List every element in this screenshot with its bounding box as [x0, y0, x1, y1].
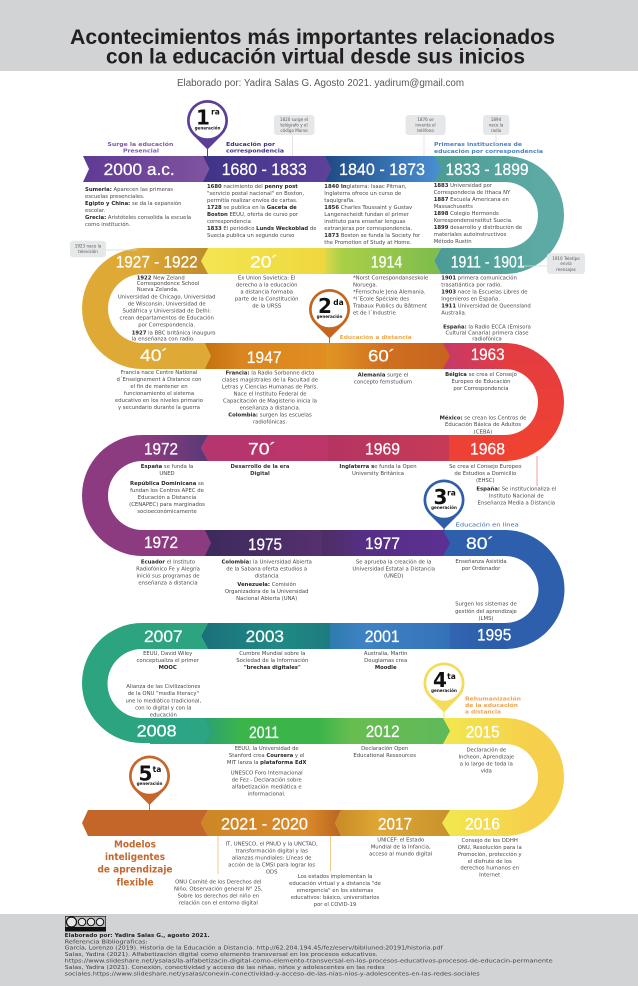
text: 1995: gestión del aprendizaje	[455, 608, 517, 615]
connector: 1968 España	[536, 456, 538, 486]
text: 1911-1901: Australia.	[441, 311, 467, 317]
text: 2021-2020 estados: emergencia" en los sistemas	[297, 888, 373, 894]
ribbon: row 4 and left curve	[82, 435, 506, 556]
pin: 4ta generación: ta	[447, 672, 456, 681]
text: 1680-1833: 1728 se publica en la Gaceta de	[207, 205, 297, 211]
heading: Surge la educación Presencial	[107, 141, 173, 155]
text: España Radio ECCA: radiofónica	[472, 335, 502, 342]
pin: 4ta generación: 4	[433, 668, 447, 692]
text: 1833-1899: 1899 desarrollo y distribución de	[434, 225, 522, 231]
text: 1833-1899: 1883 Universidad por	[434, 183, 492, 189]
callout: 1910 teletipo: 1910 Teletipo	[552, 256, 580, 261]
pin: 3ra generación	[424, 480, 464, 530]
text: 2007: conceptualiza el primer	[136, 658, 200, 664]
pin: 4ta generación: generación	[431, 688, 457, 693]
text: 1972 Ecuador: enseñanza a distancia	[138, 581, 198, 587]
text: 1927-1922: 1927 la BBC británica inauguro	[132, 331, 216, 337]
text: 1840-1873: 1856 Charles Toussaint y Gustav	[324, 205, 412, 211]
ribbon: row 3 and right curve	[150, 343, 564, 461]
text: 2021-2020 IT: transformación digital y las	[236, 847, 308, 854]
text: 2007: EEUU, David Wiley	[143, 651, 192, 657]
text: 2016: ONU, Resolución para la	[458, 844, 522, 851]
heading: Educación por correspondencia: correspondencia	[226, 149, 284, 155]
year labels: 40´	[140, 347, 168, 365]
text: 1977: Universidad Estatal a Distancia	[352, 567, 435, 573]
text: 2021-2020 IT: ODS	[266, 870, 278, 876]
text: 20´: de la URSS	[252, 304, 282, 310]
text: 1911-1901: 1901 primera comunicación	[441, 276, 517, 282]
text: 1914: *l´Ecole Spéciale des	[353, 296, 409, 303]
text: 2011: EEUU, la Universidad de	[235, 746, 299, 752]
callout: 1894 radio: 1894	[491, 117, 502, 122]
text: 60´: concepto fernstudium	[354, 380, 412, 386]
callout: 1923 televisión: televisión	[78, 249, 98, 254]
header band	[0, 0, 638, 71]
callout: 1820 telégrafo: 1820 surge el	[280, 117, 308, 122]
text: 1914: Trabaux Publics du Bâtment	[352, 303, 427, 310]
text: 1947: Francia: la Radio Sorbonne dicto	[226, 371, 314, 377]
title: Acontecimientos más importantes relacionados	[70, 26, 555, 49]
text: 1968 España: Enseñanza Media a Distancia	[478, 501, 555, 507]
pin: 5ta generación: 5	[139, 762, 152, 786]
heading: Surge la educación Presencial: Presencial	[123, 149, 159, 155]
year labels: 2003	[246, 628, 284, 646]
heading: Educación en línea: Educación en línea	[456, 521, 519, 528]
text: 2016: derechos humanos en	[460, 866, 519, 872]
text: 1833-1899: 1887 Escuela Americana en	[434, 197, 509, 203]
text: 2011: de Fez - Declaración sobre	[232, 776, 302, 783]
text: 1680-1833: "servicio postal nacional" en Boston,	[207, 191, 304, 197]
connector: 2021 right	[330, 836, 332, 871]
text: 1975: de la Sabana oferta estudios a	[226, 567, 307, 573]
text: 20´: a distancia formaba	[240, 290, 293, 296]
pin: 1ra generación: ra	[211, 108, 220, 116]
text: 2017: acceso al mundo digital	[369, 851, 432, 857]
pin: 3ra generación: 3	[434, 485, 447, 509]
year labels: 2000 a.c.	[104, 161, 175, 179]
text: 40´: funcionamiento el sistema	[124, 391, 194, 397]
footer references: Salas, Yadira (2021). Alfabetización digital como elemento transversal en los procesos educativos.	[65, 951, 378, 958]
year labels: 1975	[248, 536, 282, 554]
text: 1995: Surgen los sistemas de	[455, 602, 517, 608]
text: 1968 España: Instituto Nacional de	[489, 494, 544, 500]
text: 1963 Bélgica: Bélgica se crea el Consejo	[445, 372, 517, 378]
ribbon: row 1 and first curve	[83, 156, 564, 274]
text: 1975: Colombia: la Universidad Abierta	[222, 560, 312, 566]
text: 1840-1873: taquigrafía.	[324, 197, 355, 204]
text: 2000 a.c.: Grecia: Aristóteles consolida la escuela	[85, 215, 191, 221]
year labels: 1972	[144, 440, 178, 458]
text: 2016: Consejo de los DDHH	[462, 838, 518, 844]
callout: 1910 teletipo: envía	[560, 261, 572, 266]
pin: 3ra generación: ra	[447, 488, 456, 498]
text: 2016: Promoción, protección y	[458, 851, 522, 858]
text: 1968 España: España: Se institucionaliza el	[476, 487, 556, 493]
year labels: 1995	[477, 626, 511, 644]
text: 2008: educación	[150, 711, 177, 718]
text: 1914: et de l´Industrie	[353, 311, 396, 317]
heading: Educación por correspondencia: Educación por	[226, 141, 275, 148]
text: 1833-1899: materiales autoinstructivos	[434, 232, 506, 238]
text: 2011: Stanford crea Coursera y el	[229, 753, 304, 759]
text: 1680-1833: Suecia publica un segundo curso	[207, 233, 294, 239]
text: 1947: enseñanza a distancia.	[240, 406, 301, 412]
text: 1927-1922: Universidad de Chicago, Universidad	[118, 295, 216, 301]
year labels: 1911 - 1901	[451, 254, 525, 272]
text: 2021-2020 ONU: ONU Comité de los Derechos del	[175, 878, 262, 885]
text: 2017: UNICEF: el Estado	[377, 838, 424, 844]
text: 1927-1922: por Correspondencia.	[138, 323, 195, 329]
heading: Modelos inteligentes	[98, 839, 173, 888]
text: 40´: d´Enseignement à Distance con	[116, 376, 202, 383]
text: España Radio ECCA: Cultural Canaria) primera clase	[446, 330, 528, 336]
heading: Modelos inteligentes: de aprendizaje	[98, 865, 173, 876]
callout: 1923 televisión: 1923 nace la	[75, 244, 102, 248]
text: 2011: UNESCO Foro Internacional	[231, 770, 303, 776]
text: 1927-1922: crean departamentos de Educación	[120, 315, 214, 322]
text: 20´: parte de la Constitución	[235, 296, 298, 303]
callout: 1894 radio: nace la	[489, 122, 504, 128]
text: 1911-1901: 1903 nace la Escuelas Libres de	[441, 290, 528, 296]
text: 1927-1922: de Wisconsin, Universidad de	[128, 302, 206, 308]
text: 1947: radiofónicas.	[253, 419, 287, 426]
footer references: Elaborado por: Yadira Salas G., agosto 2021.	[65, 933, 210, 939]
text: 2015: Declaración de	[466, 747, 506, 754]
callout: 1894 radio: radio	[491, 128, 502, 133]
text: 2000 a.c.: escolar.	[85, 208, 106, 214]
text: 1680-1833: correspondencia	[207, 219, 251, 225]
text: 2007: MOOC	[159, 665, 177, 671]
callout: 1820 telégrafo: telégrafo y el	[280, 122, 308, 128]
ribbon: row 8	[82, 810, 510, 836]
text: 2015: Incheon, Aprendizaje	[458, 755, 514, 761]
text: 1972 España: fundan los Centros APEC de	[130, 488, 204, 494]
pin: 1ra generación	[187, 100, 228, 156]
text: 1969: Inglaterra se funda la Open	[339, 464, 417, 470]
footer references: García, Lorenzo (2019). Historia de la Educación a Distancia. http://62.204.194.45/fez/eserv/bibliuned:20191/historia.pdf	[65, 945, 443, 952]
year labels: 2015	[466, 724, 500, 742]
callout: 1876 teléfono: inventa el	[415, 122, 436, 128]
pin: 2da generación: 2	[318, 294, 332, 318]
text: 1914: Noruega.	[353, 283, 378, 289]
text: 1977: (UNED)	[384, 574, 403, 580]
pin: 3ra generación: generación	[431, 505, 457, 510]
text: 2016: Internet	[479, 873, 500, 879]
year labels: 1969	[365, 440, 400, 458]
text: 1995: (LMS)	[478, 616, 494, 622]
subtitle: Elaborado por: Yadira Salas G. Agosto 2021. yadirum@gmail.com	[177, 78, 464, 89]
title: con la educación virtual desde sus inicios	[106, 45, 525, 68]
year labels	[104, 161, 528, 834]
ribbon: row 7 and right curve	[150, 718, 564, 836]
text: 40´: y secundario durante la guerra	[118, 405, 200, 411]
text: 2008: de la ONU "media literacy"	[128, 691, 199, 697]
text: 1680-1833: 1680 nacimiento del penny post	[207, 184, 298, 190]
heading: Educación a distancia: Educación a distancia	[340, 334, 412, 341]
text: 1927-1922: Correspondence School	[137, 281, 199, 287]
callout: 1894 radio	[483, 115, 509, 146]
footer band	[0, 914, 638, 986]
text: 1972 España: UNED	[159, 471, 175, 477]
text: 1833-1899: Massachusetts	[434, 204, 473, 210]
footer references: sociales.https://www.slideshare.net/ysalas/conexin-conectividad-y-acceso-de-las-nias-nios-y-adolescentes-en-las-redes-sociales	[65, 972, 480, 978]
year labels: 80´	[466, 535, 494, 553]
text: 1840-1873: Inglaterra ofrece un curso de	[324, 191, 401, 197]
year labels: 2017	[378, 816, 412, 834]
text: 1840-1873: extranjeras por correspondencia.	[324, 226, 412, 232]
text: 2011: alfabetización mediática e	[232, 783, 302, 790]
heading: Modelos inteligentes: inteligentes	[105, 852, 165, 863]
ribbon: row 2 and left curve	[82, 248, 441, 369]
year labels: 1977	[365, 535, 400, 553]
text: 2021-2020 ONU: Sobre los derechos del niño en	[178, 893, 259, 899]
text: 2016: el disfrute de los	[468, 859, 512, 865]
text: 1977: Se aprueba la creación de la	[356, 559, 431, 566]
pin: 5ta generación: generación	[137, 781, 162, 786]
heading: Rehumanización: Rehumanización	[465, 696, 521, 703]
text: 1972 Ecuador: inició sus programas de	[136, 573, 200, 580]
text: 1972 España: República Dominicana se	[130, 481, 204, 487]
year labels: 1968	[470, 440, 505, 458]
text: 2012: Educational Ressources	[353, 753, 416, 759]
text: 2021-2020 IT: acción de la CMSI para lograr los	[228, 861, 315, 868]
heading: Rehumanización	[465, 696, 521, 716]
text: 40´: el fin de mantener en	[130, 384, 188, 390]
year labels: 1972	[144, 534, 178, 552]
text: 2021-2020 IT: alianzas mundiales: Líneas de	[232, 854, 311, 861]
text: 1975: Venezuela: Comisión	[237, 582, 296, 588]
text: 1947: clases magistrales de la Facultad de	[222, 378, 318, 384]
text: 2012: Declaración Open	[361, 745, 408, 752]
text: 70´: Digital	[250, 471, 270, 477]
callout: 1876 teléfono	[406, 115, 446, 156]
text: 2011: informacional.	[248, 791, 286, 797]
text: 1972 España: España se funda la	[141, 464, 193, 470]
text: 2021-2020 ONU: Niño, Observación general N° 25,	[174, 885, 263, 892]
text: 2000 a.c.: Egipto y China: se da la expansión	[85, 201, 181, 207]
year labels: 1947	[247, 349, 282, 367]
year labels: 1963	[471, 346, 505, 364]
text: 2015: a lo largo de toda la	[460, 762, 513, 768]
text: 80´: Enseñanza Asistida	[455, 559, 507, 565]
text: 1968: Se crea el Consejo Europeo	[449, 464, 522, 470]
text: 1972 España: socioeconómicamente	[137, 508, 197, 515]
heading: Primeras instituciones: Primeras instituciones de	[434, 142, 522, 148]
text: 1963 México: (CEBA)	[474, 429, 492, 435]
text: 2001: Moodle	[375, 665, 397, 671]
pin: 2da generación	[309, 289, 350, 343]
text: 1680-1833: 1833 El periódico Lunds Weckoblad de	[207, 226, 317, 232]
text: 1840-1873: 1840 Inglaterra: Isaac Pitman,	[324, 184, 407, 190]
text: 1927-1922: 1922 New Zeland	[137, 276, 185, 282]
year labels: 1833 - 1899	[446, 161, 528, 179]
text: 2021-2020 estados: educación virtual y a distancia "de	[289, 880, 381, 887]
callout: 1820 telégrafo	[274, 115, 314, 156]
text: 1969: University Británica	[352, 470, 404, 477]
text: 1927-1922: Sudáfrica y Universidad de Delhi:	[122, 308, 211, 315]
text: 2000 a.c.: escuelas presenciales.	[85, 194, 145, 200]
heading: Modelos inteligentes: Modelos	[114, 839, 156, 850]
year labels: 2001	[365, 628, 400, 646]
text: 40´: Francia nace Centre National	[121, 370, 197, 376]
pin: 2da generación: generación	[317, 314, 342, 319]
year labels: 2008	[137, 722, 177, 740]
text: 1947: Capacitación de Magisterio inicia la	[223, 398, 317, 405]
text: 2017: Mundial de la Infancia,	[371, 844, 431, 850]
text: 60´: Alemania surge el	[358, 373, 408, 379]
text: 1927-1922: Nueva Zelanda.	[137, 287, 179, 293]
text: 2001: Australia, Martin	[364, 651, 408, 657]
pin: 1ra generación: 1	[196, 106, 210, 130]
callout: 1820 telégrafo: código Morse	[280, 128, 308, 133]
text: 2021-2020 ONU: relación con el entorno digital	[179, 899, 258, 906]
text: 1947: Nace el Instituto Federal de	[234, 392, 306, 398]
callout: 1910 teletipo: mensajes	[556, 267, 576, 272]
heading: Rehumanización: a distancia	[465, 710, 501, 716]
year labels: 1840 - 1873	[339, 161, 425, 179]
connector: 2021 left	[217, 836, 219, 874]
text: 2003: Sociedad de la Información	[236, 657, 308, 664]
text: 2001: Dougiamas crea	[364, 658, 407, 664]
text: 1963 Bélgica: Europeo de Educación	[451, 378, 511, 385]
text: España Radio ECCA: España: la Radio ECCA (Emisora	[443, 325, 531, 331]
text: 1968: (EHSC)	[476, 478, 495, 484]
text: 1972 Ecuador: Radiofónico Fe y Alegría	[136, 566, 200, 573]
text: 2021-2020 estados: educativos: básico, universitarios	[291, 894, 380, 901]
text: 1833-1899: 1898 Colegio Hermonds	[434, 211, 499, 217]
text: 40´: educativo en los niveles primario	[115, 398, 203, 404]
text: 20´: derecho a la educación	[236, 282, 297, 289]
heading: Primeras instituciones	[434, 142, 543, 155]
heading: Primeras instituciones: educación por correspondencia	[434, 148, 543, 155]
text: 1840-1873: 1873 Boston se funda la Society for	[324, 233, 420, 239]
text: 1680-1833: permitía realizar envíos de cartas.	[207, 197, 298, 204]
text: 20´: Ex Union Sovietica: El	[238, 276, 296, 282]
year labels: 60´	[368, 348, 395, 366]
callout: 1923 televisión	[70, 241, 137, 257]
text: 1972 España: (CENAPEC) para marginados	[129, 502, 205, 508]
text: 1911-1901: 1911 Universidad de Queensland	[441, 304, 531, 310]
text: 2008: une lo mediático tradicional,	[125, 697, 201, 704]
text: 1963 México: Educación Básica de Adultos	[445, 421, 521, 428]
text: 2015: vida	[481, 769, 492, 775]
icon: creative commons badge	[65, 916, 106, 932]
year labels: 1914	[371, 254, 402, 272]
pin: 4ta generación	[424, 663, 464, 718]
text: 1680-1833: Boston EEUU, oferta de curso por	[207, 212, 298, 218]
text: 2011: MIT lanza la plataforma EdX	[227, 760, 306, 766]
text: 1975: Organizadora de la Universidad	[225, 589, 309, 595]
text: 1833-1899: Korrespondensinstitut Suecia.	[434, 218, 513, 224]
ribbon: row 6 and left curve	[82, 623, 506, 743]
callout: 1876 teléfono: teléfono	[417, 128, 434, 133]
year labels: 70´	[248, 440, 276, 458]
text: 1911-1901: Ingenieros en España.	[441, 297, 500, 303]
text: 1840-1873: Langenscheidt fundan el primer	[324, 212, 410, 218]
year labels: 1680 - 1833	[222, 161, 307, 179]
footer references: Salas, Yadira (2021). Conexión, conectividad y acceso de las niñas, niños y adolescentes en las redes	[65, 964, 385, 971]
year labels: 2021 - 2020	[221, 816, 308, 834]
text: 80´: por Ordenador	[462, 566, 501, 572]
text: 2003: "brechas digitales"	[244, 665, 301, 671]
pin: 1ra generación: generación	[195, 125, 220, 130]
text: 1840-1873: instituto para enseñar lenguas	[324, 219, 406, 225]
text: 1968: de Estudios a Domicilio	[454, 471, 516, 477]
year labels: 2007	[144, 628, 183, 646]
text: 1975: distancia	[255, 574, 279, 580]
text: 2003: Cumbre Mundial sobre la	[239, 651, 305, 657]
text: 1963 Bélgica: por Correspondencia	[453, 386, 509, 392]
title	[70, 26, 555, 68]
year labels: 2012	[366, 723, 400, 741]
year labels: 2011	[249, 724, 279, 742]
text: 2000 a.c.: como institución.	[85, 221, 131, 228]
text: 1972 Ecuador: Ecuador el Instituto	[141, 560, 195, 566]
pin: 2da generación: da	[333, 298, 344, 307]
ribbon: row 5 and right curve	[150, 530, 564, 649]
text: 1833-1899: Método Rustin	[434, 238, 472, 245]
footer references: https://www.slideshare.net/ysalas/la-alfabetizacin-digital-como-elemento-transversal-en-los-procesos-educativos-procesos-de-educacin-permanente	[65, 959, 553, 965]
text: 1833-1899: Correspondecia de Ithaca NY	[434, 190, 511, 196]
footer references	[65, 933, 553, 978]
text: 1947: Letras y Ciencias Humanas de París.	[222, 384, 318, 391]
heading: Modelos inteligentes: flexible	[116, 877, 154, 888]
callout: 1910 teletipo	[518, 253, 585, 274]
text: 1911-1901: trasatlántica por radio.	[441, 282, 502, 289]
text: 2021-2020 estados: Los estados implementan la	[298, 874, 372, 880]
text: 1914: *Fernschule Jena Alemania.	[353, 290, 426, 296]
text: 2008: Alianza de las Civilizaciones	[126, 684, 201, 690]
pin: 5ta generación: ta	[153, 765, 161, 774]
text: 2008: con lo digital y con la	[135, 705, 192, 711]
text: 1914: *Norst Correspondanseskole	[353, 276, 428, 282]
callout: 1876 teléfono: 1876 se	[417, 117, 434, 122]
text: 2021-2020 estados: por el COVID-19	[314, 902, 356, 908]
heading: Rehumanización: de la educación	[465, 702, 518, 709]
text: 2000 a.c.: Sumeria: Aparecen las primeras	[85, 187, 173, 193]
heading: Surge la educación Presencial: Surge la educación	[107, 141, 173, 148]
text: 1947: Colombia: surgen las escuelas	[228, 413, 312, 419]
year labels: 20´	[250, 254, 278, 272]
text: 1972 España: Educación a Distancia	[138, 494, 196, 501]
text: 1975: Nacional Abierta (UNA)	[236, 596, 297, 602]
text: 2021-2020 IT: IT, UNESCO, el PNUD y la UNCTAD,	[226, 841, 318, 847]
text: 1927-1922: la enseñanza con radio.	[132, 336, 195, 342]
pin: 5ta generación	[129, 756, 170, 810]
footer references: Referencia Bibliograficas:	[65, 940, 148, 946]
text: 1963 México: México: se crean los Centros de	[440, 415, 526, 421]
year labels: 1927 - 1922	[116, 254, 198, 272]
year labels: 2016	[465, 816, 500, 834]
text: 1840-1873: the Promotion of Study at Home.	[324, 240, 412, 246]
text: 70´: Desarrollo de la era	[231, 464, 290, 470]
heading: Educación por correspondencia	[226, 141, 284, 155]
